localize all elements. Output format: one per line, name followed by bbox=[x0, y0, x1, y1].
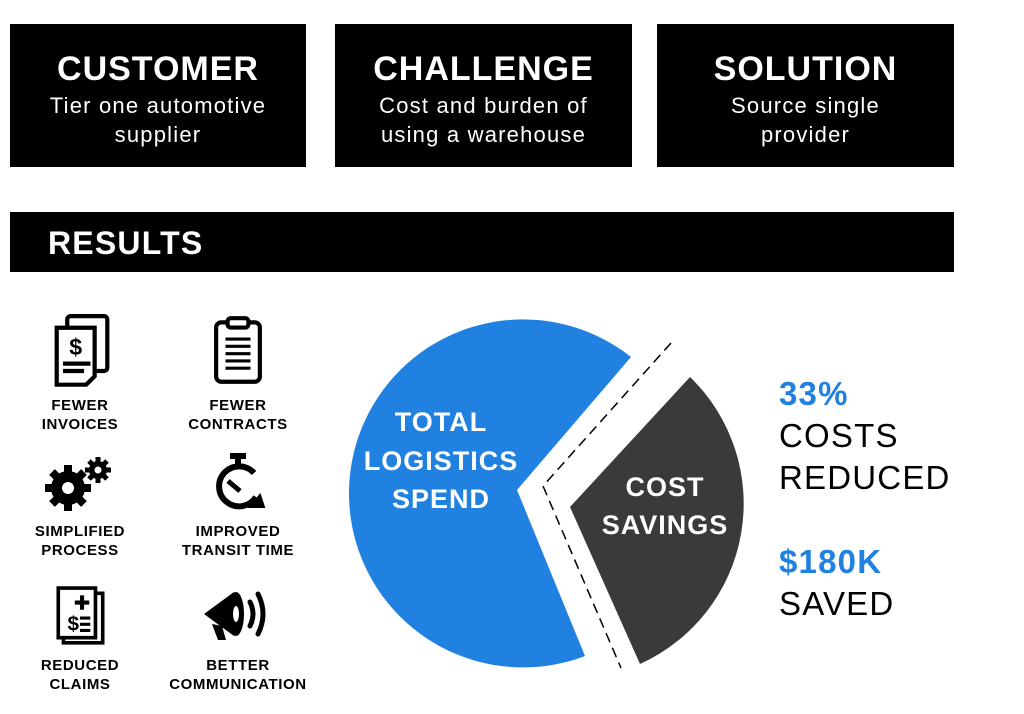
label: reduced claims: CLAIMS bbox=[49, 676, 111, 693]
panel: solution: SOLUTION bbox=[714, 50, 897, 88]
pie slice: total logistics spend bbox=[349, 319, 631, 667]
label: fewer invoices bbox=[42, 397, 118, 433]
panel: challenge bbox=[335, 24, 632, 167]
pie slice: cost savings bbox=[570, 377, 744, 664]
pie slice: total logistics spend: LOGISTICS bbox=[364, 446, 518, 476]
label: fewer contracts: CONTRACTS bbox=[188, 416, 288, 433]
icon: gears bbox=[45, 457, 111, 511]
pie slice: total logistics spend: SPEND bbox=[392, 484, 490, 514]
panel: solution bbox=[657, 24, 954, 167]
stat: $180K saved bbox=[779, 543, 894, 622]
stat: 33% costs reduced: COSTS bbox=[779, 417, 899, 454]
label: reduced claims bbox=[41, 657, 119, 693]
stat: 33% costs reduced: 33% bbox=[779, 375, 849, 412]
icon: megaphone bbox=[204, 592, 266, 640]
panel: challenge: using a warehouse bbox=[381, 122, 586, 147]
pie slice: cost savings: SAVINGS bbox=[602, 510, 728, 540]
label: fewer invoices: FEWER bbox=[51, 397, 109, 414]
label: improved transit time: TRANSIT TIME bbox=[182, 542, 294, 559]
icon: invoices: $ bbox=[69, 334, 82, 360]
pie slice: total logistics spend: TOTAL bbox=[395, 407, 487, 437]
panel: solution: Source single bbox=[731, 93, 880, 118]
panel: customer: supplier bbox=[115, 122, 201, 147]
panel: customer bbox=[10, 24, 306, 167]
label: reduced claims: REDUCED bbox=[41, 657, 119, 674]
heading: results bar bbox=[10, 212, 954, 272]
stat: $180K saved: SAVED bbox=[779, 585, 894, 622]
label: improved transit time: IMPROVED bbox=[196, 523, 280, 540]
label: fewer invoices: INVOICES bbox=[42, 416, 118, 433]
icon: claims bbox=[56, 586, 104, 645]
label: improved transit time bbox=[182, 523, 294, 559]
dashed cut line bbox=[543, 343, 671, 668]
icon: claims: $ bbox=[68, 612, 80, 635]
icon: stopwatch bbox=[216, 453, 266, 510]
label: simplified process bbox=[35, 523, 125, 559]
label: better communication: BETTER bbox=[206, 657, 270, 674]
label: simplified process: SIMPLIFIED bbox=[35, 523, 125, 540]
label: simplified process: PROCESS bbox=[41, 542, 119, 559]
panel: customer: Tier one automotive bbox=[50, 93, 266, 118]
panel: challenge: Cost and burden of bbox=[379, 93, 588, 118]
panel: challenge: CHALLENGE bbox=[373, 50, 594, 88]
icon: contracts bbox=[214, 316, 262, 384]
heading: results bar: RESULTS bbox=[48, 225, 203, 261]
stat: 33% costs reduced bbox=[779, 375, 951, 496]
label: fewer contracts bbox=[188, 397, 288, 433]
panel: customer: CUSTOMER bbox=[57, 50, 259, 88]
stat: 33% costs reduced: REDUCED bbox=[779, 459, 951, 496]
icon: invoices bbox=[54, 314, 110, 387]
label: fewer contracts: FEWER bbox=[209, 397, 267, 414]
label: better communication: COMMUNICATION bbox=[169, 676, 307, 693]
label: better communication bbox=[169, 657, 307, 693]
pie slice: cost savings: COST bbox=[625, 472, 705, 502]
stat: $180K saved: $180K bbox=[779, 543, 882, 580]
panel: solution: provider bbox=[761, 122, 850, 147]
